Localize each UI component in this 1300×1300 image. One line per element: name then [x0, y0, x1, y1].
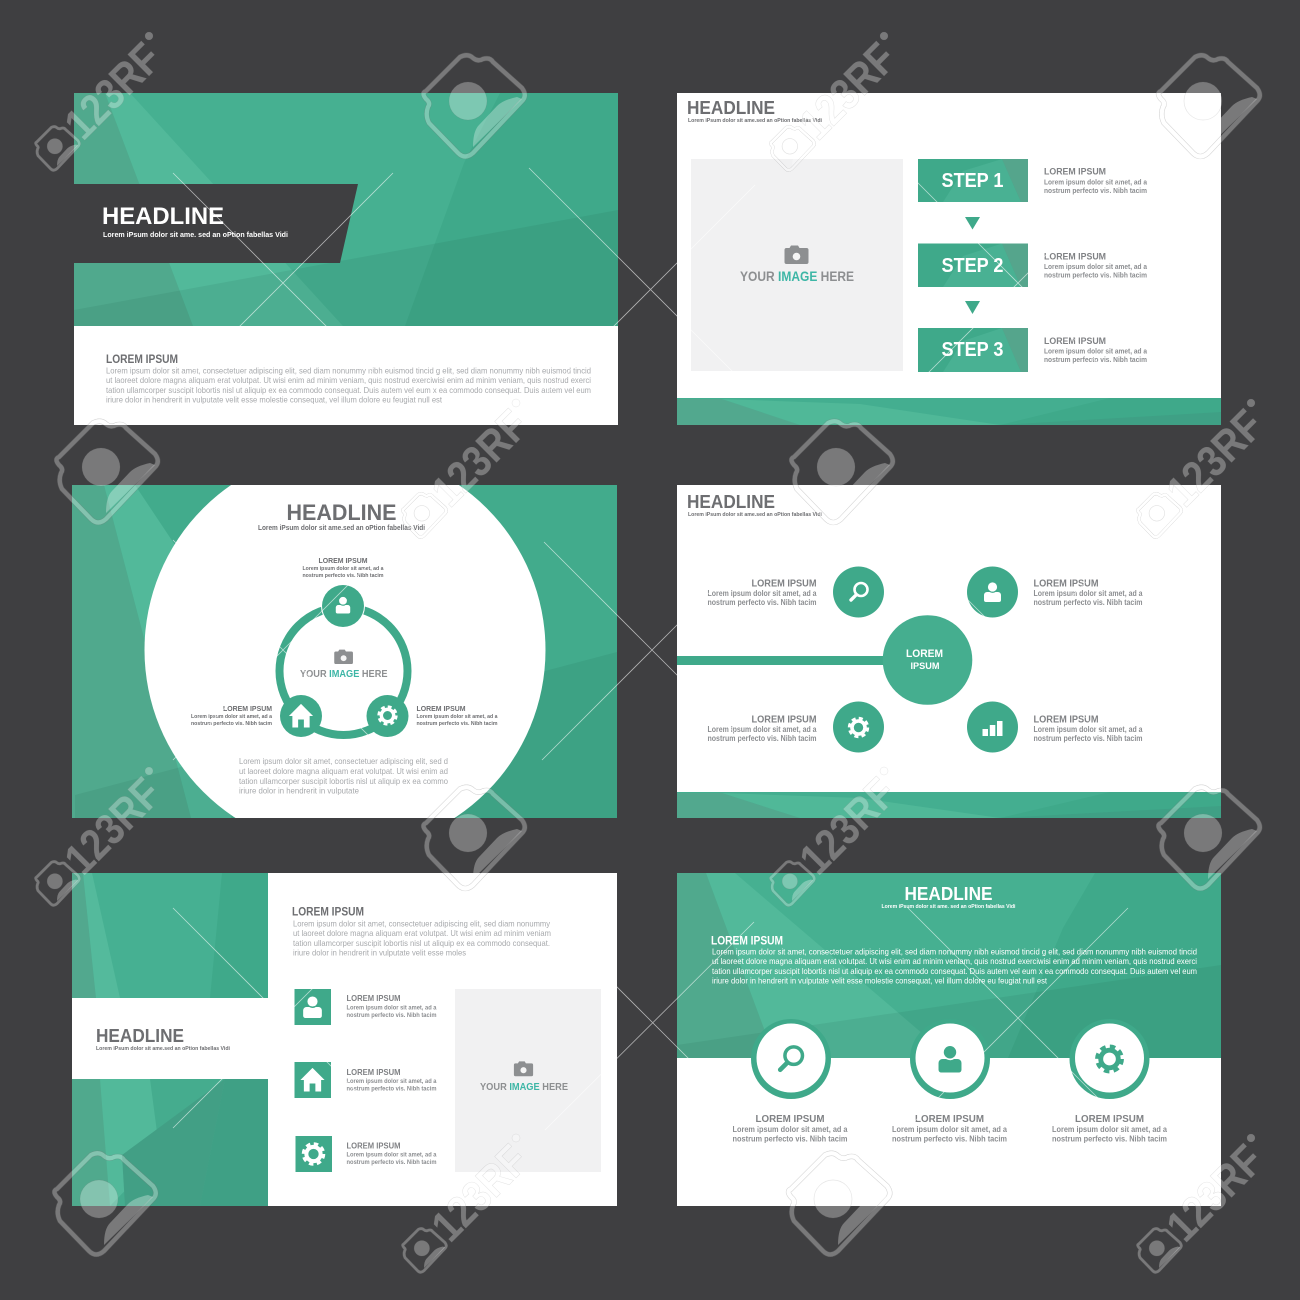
image placeholder: YOUR IMAGE HERE	[740, 269, 854, 284]
green faceted background	[72, 485, 617, 818]
step 3 box	[918, 328, 1028, 372]
central hub	[883, 615, 972, 705]
icon: person circle	[910, 1019, 990, 1099]
bottom right text: Lorem ipsum dolor sit amet, ad a	[1034, 725, 1143, 734]
image placeholder	[691, 159, 903, 371]
arrow 1	[965, 217, 980, 230]
icon: home square	[294, 1062, 331, 1098]
body text	[106, 366, 591, 404]
list item 3	[346, 1140, 437, 1166]
step 2 text	[1044, 252, 1148, 280]
body text: iriure dolor in hendrerit in vulputate velit esse molestie consequat, vel illum dolore eu feugiat null est	[106, 394, 443, 404]
arrow 2	[965, 301, 980, 314]
body text: Lorem ipsum dolor sit amet, consectetuer adipiscing elit, sed diam nonummy	[293, 918, 551, 928]
body text: ut laoreet dolore magna aliquam erat volutpat. Ut wisi enim ad minim veniam, quis nostrud exerciwisi enim ad minim veniam, quis nostrud exerci	[106, 375, 591, 385]
body text: tation ullamcorper suscipit lobortis nisl ut aliquip ex ea commo	[239, 776, 448, 786]
list item 2: nostrum perfecto vis. Nibh tacim	[346, 1086, 437, 1092]
step 2 text: Lorem ipsum dolor sit amet, ad a	[1044, 262, 1148, 271]
right item text: Lorem ipsum dolor sit amet, ad a	[416, 714, 498, 720]
column 1 text: nostrum perfecto vis. Nibh tacim	[732, 1134, 848, 1144]
body heading: LOREM IPSUM	[106, 352, 178, 366]
bottom left text: nostrum perfecto vis. Nibh tacim	[708, 734, 817, 743]
image placeholder label: YOUR IMAGE HERE	[300, 669, 388, 680]
column 1 text: Lorem ipsum dolor sit amet, ad a	[732, 1125, 848, 1134]
icon: search node	[833, 566, 884, 618]
icon: gear circle	[1070, 1019, 1150, 1099]
bottom left text: LOREM IPSUM	[752, 714, 817, 726]
icon: person node	[967, 566, 1018, 618]
top left text	[708, 578, 817, 607]
right item text	[416, 704, 498, 727]
step 3 text: LOREM IPSUM	[1044, 336, 1106, 347]
subheadline: Lorem iPsum dolor sit ame.sed an oPtion fabellas Vidi	[688, 118, 822, 124]
list item 3: nostrum perfecto vis. Nibh tacim	[346, 1159, 437, 1166]
top left text: Lorem ipsum dolor sit amet, ad a	[708, 589, 817, 598]
left item text: nostrum perfecto vis. Nibh tacim	[191, 721, 272, 727]
headline: HEADLINE	[286, 500, 396, 525]
panel: three steps	[677, 93, 1221, 425]
central hub: LOREM	[906, 648, 943, 660]
bottom right text	[1034, 714, 1143, 743]
column 3 text: nostrum perfecto vis. Nibh tacim	[1052, 1134, 1167, 1144]
body text: ut laoreet dolore magna aliquam erat volutpat. Ut wisi enim ad minim veniam, quis nostrud exerciwisi enim ad minim veniam, quis nostrud exerci	[712, 956, 1197, 966]
icon: gear square	[296, 1136, 332, 1172]
panel: hub and spokes	[677, 485, 1221, 818]
subheadline: Lorem iPsum dolor sit ame.sed an oPtion fabellas Vidi	[688, 512, 822, 518]
top item text	[302, 556, 384, 579]
body text: iriure dolor in hendrerit in vulputate velit esse moles	[293, 948, 466, 958]
icon: home node	[280, 695, 322, 737]
large white circle	[144, 485, 546, 818]
body text: tation ullamcorper suscipit lobortis nisl ut aliquip ex ea commodo consequat.	[293, 938, 550, 948]
list item 1: LOREM IPSUM	[346, 993, 400, 1003]
headline: HEADLINE	[687, 98, 775, 118]
headline: HEADLINE	[96, 1026, 184, 1046]
ring	[280, 607, 408, 735]
top item text: nostrum perfecto vis. Nibh tacim	[302, 573, 384, 579]
right item text: LOREM IPSUM	[416, 704, 466, 713]
step 1 box: STEP 1	[942, 170, 1004, 192]
list item 1: nostrum perfecto vis. Nibh tacim	[346, 1012, 437, 1019]
bottom left text: Lorem ipsum dolor sit amet, ad a	[708, 725, 817, 734]
step 3 text: nostrum perfecto vis. Nibh tacim	[1044, 355, 1147, 364]
column 3 text: Lorem ipsum dolor sit amet, ad a	[1052, 1125, 1168, 1134]
top item text: Lorem ipsum dolor sit amet, ad a	[302, 566, 384, 572]
column 2 text: nostrum perfecto vis. Nibh tacim	[892, 1134, 1007, 1144]
body heading: LOREM IPSUM	[292, 904, 364, 918]
top right text	[1034, 578, 1143, 607]
list item 1	[346, 993, 437, 1019]
image placeholder: YOUR IMAGE HERE	[480, 1081, 568, 1093]
step 1 text: nostrum perfecto vis. Nibh tacim	[1044, 186, 1147, 195]
top left text: nostrum perfecto vis. Nibh tacim	[708, 598, 817, 607]
body text: Lorem ipsum dolor sit amet, consectetuer adipiscing elit, sed diam nonummy nibh euismod tincid g elit, sed diam nonummy nibh euismod tincid	[106, 366, 591, 376]
body text	[293, 918, 551, 958]
headline: HEADLINE	[102, 203, 224, 230]
icon: search circle	[751, 1019, 831, 1099]
headline: HEADLINE	[687, 492, 775, 512]
panel: title slide	[74, 93, 618, 425]
step 1 text: LOREM IPSUM	[1044, 166, 1106, 178]
central hub: IPSUM	[910, 661, 940, 672]
dark headline band	[74, 184, 358, 263]
body text: tation ullamcorper suscipit lobortis nisl ut aliquip ex ea commodo consequat. Duis autem vel eum x ea commodo consequat. Duis autem vel eum	[106, 385, 591, 395]
green faceted banner	[74, 93, 618, 326]
body heading: LOREM IPSUM	[711, 934, 783, 948]
image placeholder	[455, 989, 601, 1172]
body text: ut laoreet dolore magna aliquam erat volutpat. Ut wisi enim ad minim veniam	[293, 928, 551, 938]
icon: gear node	[833, 702, 884, 752]
panel: sidebar with list	[72, 873, 617, 1206]
column 1 text	[732, 1113, 848, 1144]
list item 1: Lorem ipsum dolor sit amet, ad a	[346, 1004, 437, 1012]
column 2 text: LOREM IPSUM	[915, 1113, 984, 1125]
left item text: LOREM IPSUM	[223, 704, 272, 713]
panel: three circles	[677, 873, 1221, 1206]
list item 2	[346, 1067, 437, 1092]
body text: iriure dolor in hendrerit in vulputate	[239, 786, 359, 796]
list item 3: LOREM IPSUM	[346, 1140, 400, 1150]
left item text: Lorem ipsum dolor sit amet, ad a	[191, 714, 273, 720]
icon: gear node	[366, 695, 408, 737]
list item 2: LOREM IPSUM	[346, 1067, 400, 1077]
step 3 box: STEP 3	[942, 339, 1004, 361]
step 2 text: nostrum perfecto vis. Nibh tacim	[1044, 270, 1147, 280]
icon: bar chart node	[967, 702, 1018, 752]
left item text	[191, 704, 273, 727]
body text: Lorem ipsum dolor sit amet, consectetuer adipiscing elit, sed diam nonummy nibh euismod tincid g elit, sed diam nonummy nibh euismod tincid	[712, 946, 1197, 956]
green sidebar bottom	[72, 1079, 268, 1206]
step 2 text: LOREM IPSUM	[1044, 252, 1106, 262]
column 3 text	[1052, 1113, 1168, 1144]
top right text: nostrum perfecto vis. Nibh tacim	[1034, 598, 1143, 607]
headline: HEADLINE	[904, 884, 992, 904]
subheadline: Lorem iPsum dolor sit ame.sed an oPtion fabellas Vidi	[258, 525, 425, 532]
step 2 box	[918, 244, 1028, 287]
body text	[239, 756, 448, 796]
right item text: nostrum perfecto vis. Nibh tacim	[416, 721, 498, 727]
green footer	[677, 792, 1221, 818]
icon: person square	[294, 989, 331, 1025]
green footer	[677, 398, 1221, 425]
top right text: LOREM IPSUM	[1034, 578, 1099, 590]
bottom left text	[708, 714, 817, 743]
green faceted header	[677, 873, 1221, 1058]
column 1 text: LOREM IPSUM	[756, 1113, 825, 1125]
body text: tation ullamcorper suscipit lobortis nisl ut aliquip ex ea commodo consequat. Duis autem vel eum x ea commodo consequat. Duis autem vel eum	[712, 966, 1197, 976]
connector bar	[677, 656, 887, 665]
bottom right text: LOREM IPSUM	[1034, 714, 1099, 726]
column 3 text: LOREM IPSUM	[1075, 1113, 1144, 1125]
body text: Lorem ipsum dolor sit amet, consectetuer adipiscing elit, sed d	[239, 756, 448, 766]
list item 3: Lorem ipsum dolor sit amet, ad a	[346, 1152, 437, 1158]
top left text: LOREM IPSUM	[752, 578, 817, 590]
step 1 box	[918, 159, 1028, 202]
body text	[712, 946, 1197, 986]
watermark: thin diagonal crosses	[173, 168, 1128, 1130]
subheadline: Lorem iPsum dolor sit ame. sed an oPtion fabellas Vidi	[103, 230, 288, 239]
green sidebar top	[72, 873, 268, 998]
step 1 text: Lorem ipsum dolor sit amet, ad a	[1044, 178, 1148, 186]
step 3 text: Lorem ipsum dolor sit amet, ad a	[1044, 346, 1148, 356]
column 2 text: Lorem ipsum dolor sit amet, ad a	[892, 1125, 1008, 1134]
panel: circular cycle	[72, 485, 617, 818]
icon: person node	[321, 584, 365, 628]
top item text: LOREM IPSUM	[318, 556, 368, 565]
image placeholder label	[300, 650, 388, 680]
list item 2: Lorem ipsum dolor sit amet, ad a	[346, 1078, 437, 1085]
bottom right text: nostrum perfecto vis. Nibh tacim	[1034, 734, 1143, 743]
top right text: Lorem ipsum dolor sit amet, ad a	[1034, 589, 1143, 598]
subheadline: Lorem iPsum dolor sit ame.sed an oPtion fabellas Vidi	[96, 1046, 230, 1052]
subheadline: Lorem iPsum dolor sit ame. sed an oPtion fabellas Vidi	[882, 904, 1016, 910]
step 3 text	[1044, 336, 1148, 364]
body text: iriure dolor in hendrerit in vulputate velit esse molestie consequat, vel illum dolore eu feugiat null est	[712, 976, 1048, 986]
body text: ut laoreet dolore magna aliquam erat volutpat. Ut wisi enim ad	[239, 766, 448, 776]
step 2 box: STEP 2	[942, 255, 1004, 277]
step 1 text	[1044, 166, 1148, 195]
column 2 text	[892, 1113, 1008, 1144]
